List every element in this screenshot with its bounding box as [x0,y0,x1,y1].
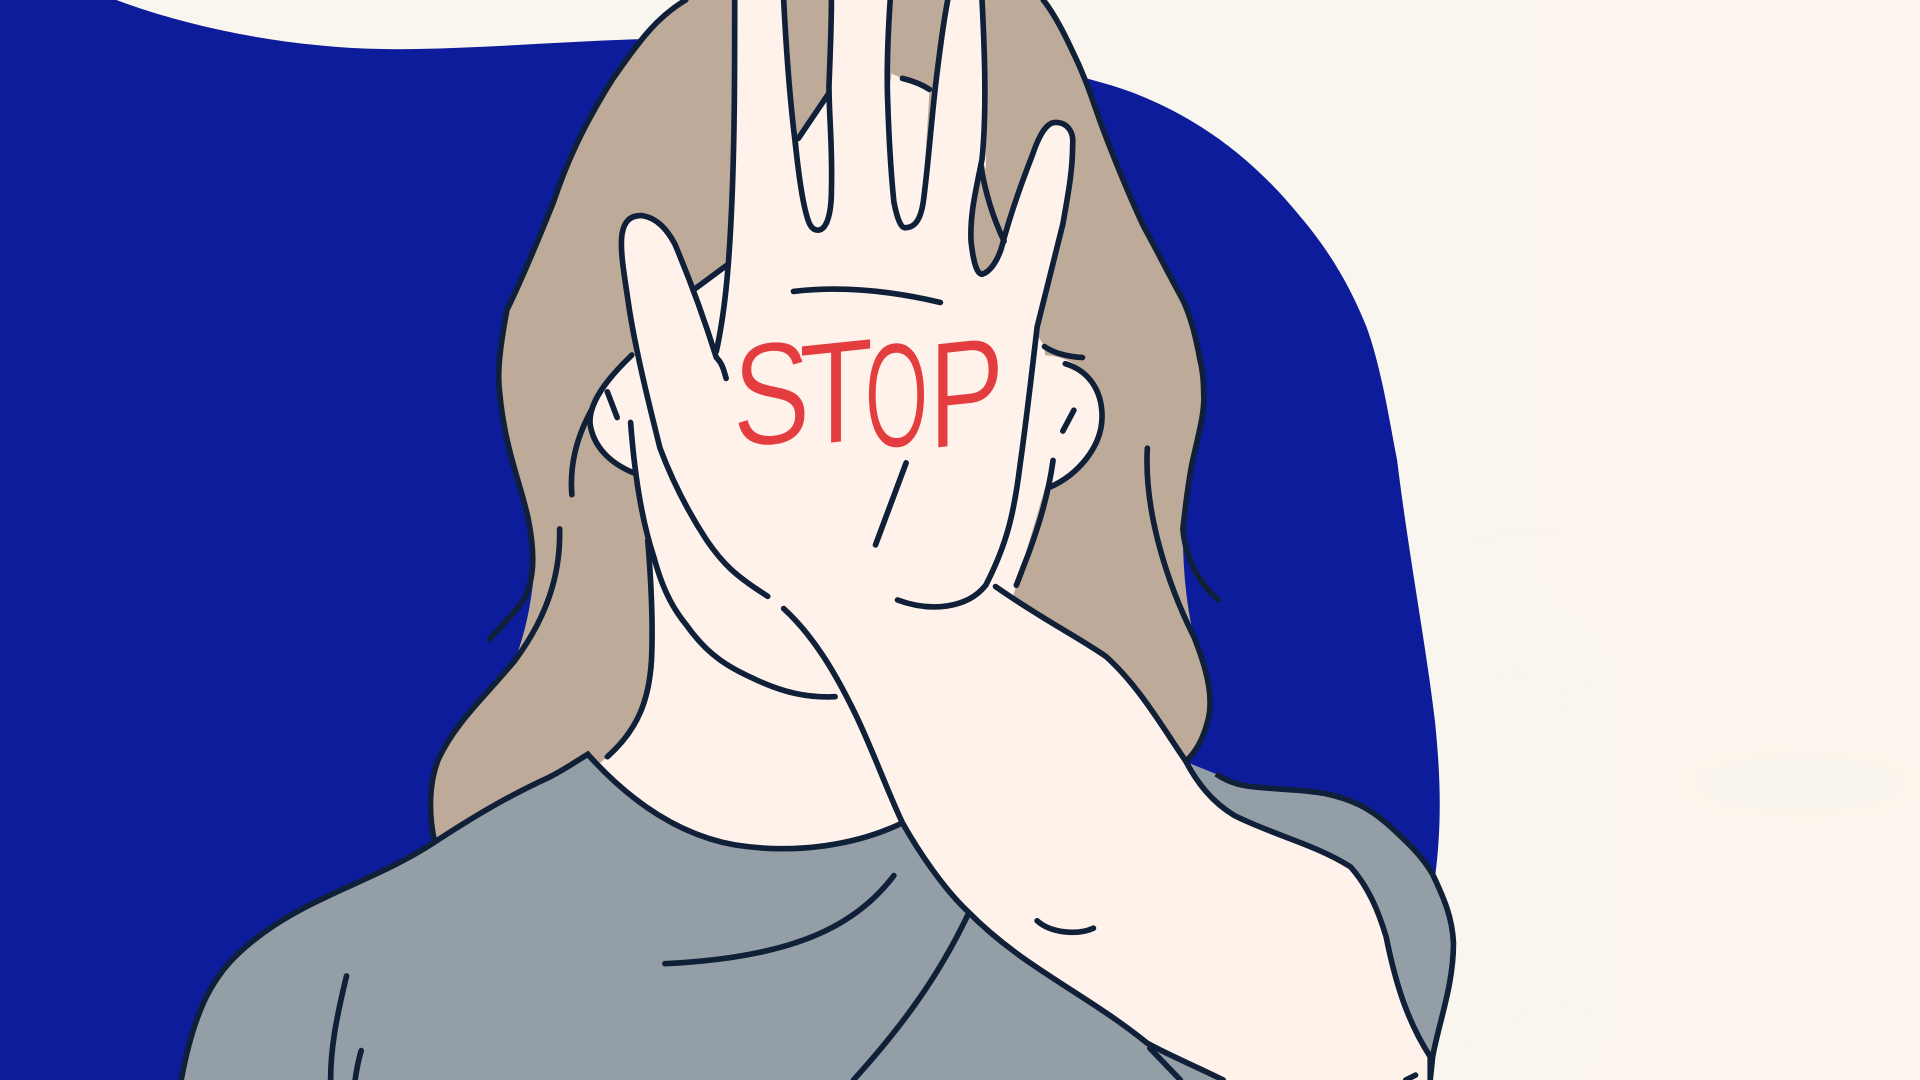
shirt [181,754,1453,1080]
finger gap: right [971,159,1002,274]
right ear [1035,347,1102,490]
STOP lettering: S [732,309,811,479]
blue background blob [0,0,1440,1080]
STOP lettering: O [864,312,928,479]
face and neck skin [598,245,1053,882]
finger gap: left lower skin [798,93,831,229]
hand and arm [607,0,1430,1080]
left ear [590,355,649,475]
STOP lettering [732,302,1005,482]
finger gap: middle [887,0,948,228]
hand outlines [607,0,1430,1080]
STOP lettering: T [798,306,874,478]
STOP lettering: P [928,302,1005,482]
finger gap: left [784,0,832,230]
finger gap: middle lower skin [888,73,929,227]
hair [430,0,1218,845]
